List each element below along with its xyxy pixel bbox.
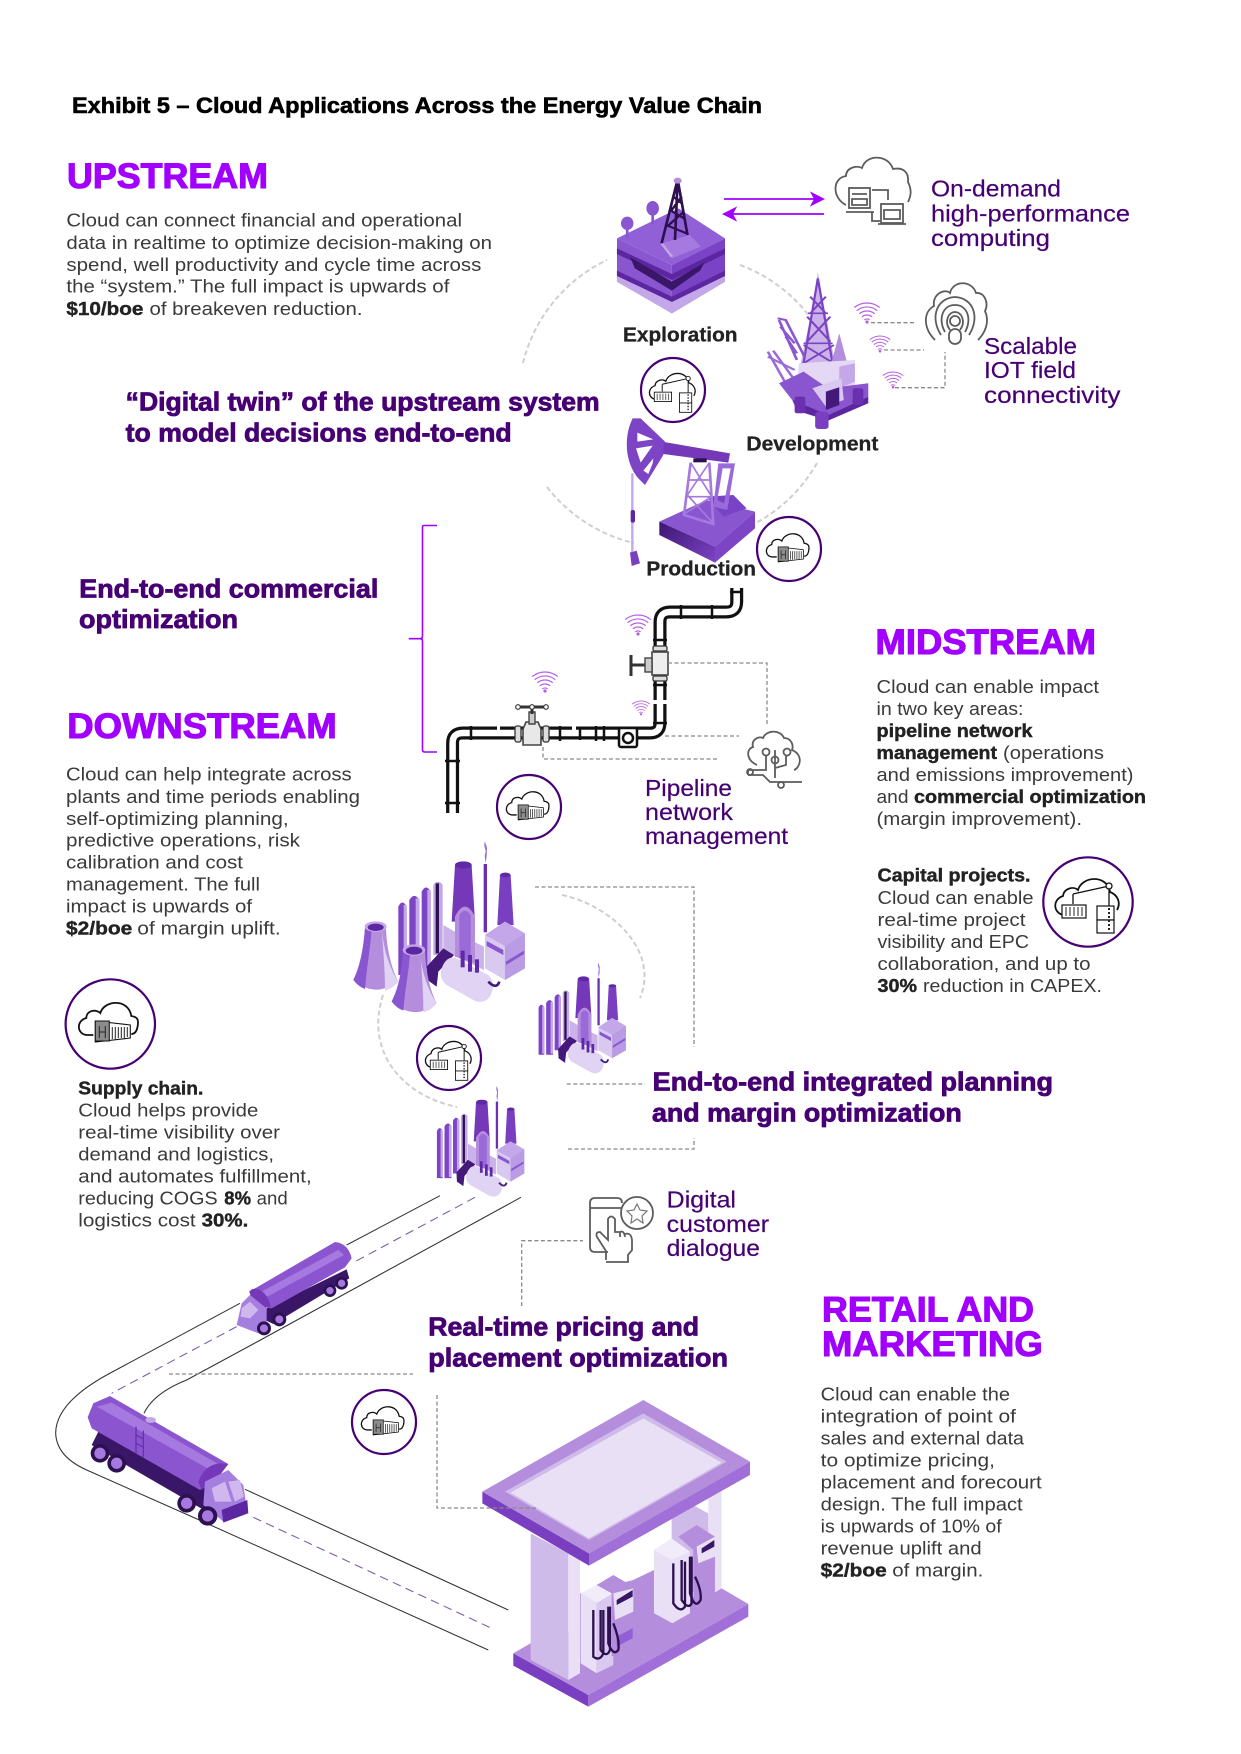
text block: retail description: placement and forecourt [821,1472,1042,1493]
label: scalable IOT connectivity [984,333,1121,408]
label: on-demand computing: On-demand [931,176,1061,202]
text block: midstream description: commercial optimization [914,786,1146,807]
text block: capital projects: collaboration, and up to [878,953,1090,974]
label: digital customer dialogue [667,1187,769,1261]
text block: capital projects: real-time project [878,909,1026,930]
heading: end-to-end commercial optimization [79,573,378,634]
text block: midstream description: in two key areas: [876,698,1024,719]
text block: capital projects: 30% [878,975,917,996]
wifi signals: pipeline [532,615,651,715]
icon: pipeline network cloud [747,732,802,788]
heading: downstream: DOWNSTREAM [67,707,337,746]
text block: capital projects: visibility and EPC [878,931,1029,952]
text block: supply chain [78,1077,312,1231]
icon circle: retail cloud container [352,1390,416,1454]
illustration: lower tanker truck [88,1396,248,1526]
dashed arcs: downstream loop [378,895,645,1107]
text block: retail description: to optimize pricing, [821,1450,995,1471]
connector lines: real-time pricing [169,1374,536,1508]
illustration: large refinery [353,842,525,1012]
heading: midstream: MIDSTREAM [876,623,1096,662]
dashed circle: upstream cycle [523,260,817,543]
text block: downstream description: impact is upwards of [66,896,253,917]
icon circle: capital projects crane cloud [1043,857,1133,947]
text block: capital projects: Capital projects. [878,865,1030,886]
text block: retail description: Cloud can enable the [821,1384,1010,1405]
illustrations: refineries [353,842,626,1197]
icon: high-performance computing cloud [836,158,911,224]
text block: supply chain: and automates fulfillment, [78,1166,312,1187]
label: on-demand computing: computing [931,225,1050,251]
text block: downstream description: Cloud can help integrate across [66,764,352,785]
icon: IOT cloud [926,283,987,344]
text block: retail description: design. The full impact [821,1494,1023,1515]
text block: upstream description: spend, well productivity and cycle time across [66,254,481,275]
text block: downstream description: $2/boe [66,918,132,939]
title: Exhibit 5 – Cloud Applications Across the Energy Value Chain [72,93,762,118]
heading: real-time pricing: placement optimization [428,1343,728,1373]
heading: digital twin: “Digital twin” of the upstream system [126,387,600,417]
label: scalable IOT connectivity: IOT field [984,357,1076,383]
text block: retail description: integration of point of [821,1406,1017,1427]
heading: end-to-end commercial optimization: End-to-end commercial [79,573,378,603]
text block: capital projects: reduction in CAPEX. [923,975,1102,996]
text block: capital projects: Cloud can enable [878,887,1034,908]
text block: upstream description: Cloud can connect financial and operational [66,210,462,231]
text block: downstream description: plants and time periods enabling [66,786,360,807]
illustration: gas station [482,1400,750,1707]
text block: retail description: is upwards of 10% of [821,1516,1003,1537]
text block: downstream description: management. The full [66,873,260,894]
label: scalable IOT connectivity: Scalable [984,333,1077,359]
text block: supply chain: Supply chain. [78,1077,203,1098]
label: digital customer dialogue: customer [667,1211,769,1237]
icon circle: supply chain cloud container [66,979,155,1069]
heading: retail and marketing: MARKETING [822,1325,1043,1364]
text block: midstream description: Cloud can enable impact [876,676,1099,697]
text block: midstream description [876,676,1146,829]
illustration: pipeline [445,588,743,813]
icon circle: pipeline cloud container [497,775,561,839]
text block: supply chain: Cloud helps provide [78,1100,258,1121]
illustration: exploration cube [617,178,725,313]
text block: midstream description: pipeline network [876,720,1033,741]
text block: upstream description: data in realtime to optimize decision-making on [66,232,492,253]
heading: end-to-end commercial optimization: optimization [79,604,238,634]
connector lines: pipeline monitoring [543,663,767,759]
text block: retail description: sales and external data [821,1428,1025,1449]
arrows: cloud data exchange [724,194,824,220]
text block: midstream description: (margin improvement). [876,808,1082,829]
text block: downstream description [66,764,360,939]
text block: supply chain: and [257,1188,288,1209]
heading: integrated planning: and margin optimization [652,1098,962,1128]
text block: upstream description: the “system.” The full impact is upwards of [66,276,450,297]
text block: supply chain: reducing COGS [78,1188,218,1209]
heading: real-time pricing [428,1312,728,1373]
label: pipeline network management: management [645,823,788,849]
wifi signals: rig [854,303,945,388]
text block: retail description [821,1384,1042,1581]
text block: downstream description: predictive operations, risk [66,830,301,851]
text block: supply chain: real-time visibility over [78,1122,280,1143]
text block: supply chain: demand and logistics, [78,1144,274,1165]
heading: upstream: UPSTREAM [67,157,268,196]
text block: upstream description [66,210,492,319]
label: pipeline network management: network [645,799,733,825]
text block: upstream description: of breakeven reduction. [150,298,362,319]
heading: integrated planning [652,1067,1053,1128]
label: production: Production [646,559,756,581]
label: scalable IOT connectivity: connectivity [984,382,1121,408]
heading: integrated planning: End-to-end integrated planning [653,1067,1053,1097]
icon circle: production cloud container [757,517,821,581]
text block: retail description: $2/boe [821,1560,887,1581]
text block: midstream description: (operations [1003,742,1104,763]
text block: midstream description: and emissions improvement) [876,764,1134,785]
text block: supply chain: 8% [224,1188,251,1209]
text block: capital projects [878,865,1102,996]
heading: digital twin [126,387,600,448]
heading: retail and marketing: RETAIL AND [822,1291,1034,1330]
text block: downstream description: self-optimizing planning, [66,808,289,829]
text block: retail description: of margin. [892,1560,983,1581]
label: exploration: Exploration [623,325,738,347]
text block: upstream description: $10/boe [66,298,143,319]
text block: midstream description: and [876,786,908,807]
icon circle: downstream crane cloud [417,1026,481,1090]
text block: midstream description: management [876,742,997,763]
illustration: offshore rig [768,272,868,429]
label: pipeline network management [645,775,788,849]
heading: digital twin: to model decisions end-to-end [126,418,512,448]
label: digital customer dialogue: Digital [667,1187,736,1213]
illustration: pumpjack [627,418,755,566]
label: development: Development [746,434,879,456]
label: pipeline network management: Pipeline [645,775,732,801]
illustration: upper tanker truck [237,1242,352,1335]
heading: retail and marketing [822,1291,1043,1364]
connector line: digital customer [522,1241,583,1306]
connector lines: integrated planning [535,887,694,1149]
bracket: commercial optimization [409,526,437,752]
heading: real-time pricing: Real-time pricing and [428,1312,699,1342]
text block: downstream description: calibration and cost [66,852,243,873]
icon circle: digital twin crane cloud [641,358,705,422]
label: on-demand computing [931,176,1130,251]
text block: retail description: revenue uplift and [821,1538,982,1559]
text block: downstream description: of margin uplift. [137,918,281,939]
text block: supply chain: logistics cost [78,1210,196,1231]
text block: supply chain: 30%. [202,1210,248,1231]
label: on-demand computing: high-performance [931,201,1130,227]
road [56,1196,521,1650]
label: digital customer dialogue: dialogue [667,1235,760,1261]
icon: digital customer hand and phone [590,1197,653,1262]
